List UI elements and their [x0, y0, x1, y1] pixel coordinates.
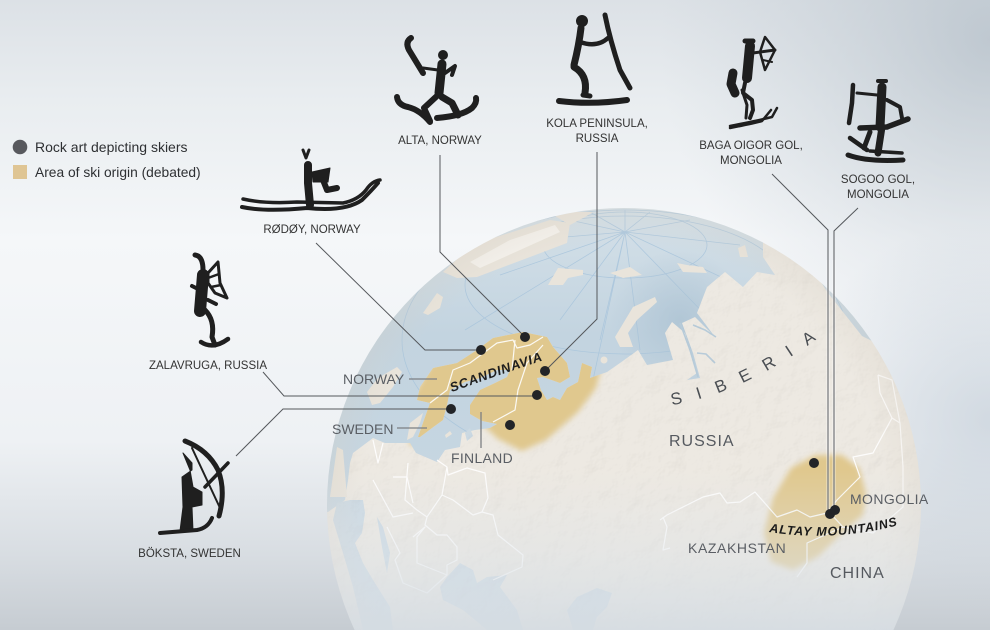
petroglyph: Baga Oigor Gol [730, 37, 777, 128]
label: Finland [451, 412, 513, 466]
area of ski origin [406, 326, 866, 570]
rivers [680, 323, 716, 377]
site label: Zalavruga: ZALAVRUGA, RUSSIA [149, 360, 267, 372]
label: Norway [343, 371, 437, 387]
leader line: Sogoo Gol [834, 208, 858, 510]
petroglyph: Zalavruga [192, 255, 228, 345]
graticule [402, 210, 843, 432]
site label: Kola Peninsula: RUSSIA [576, 133, 619, 145]
area of ski origin: altay [764, 455, 866, 570]
petroglyph: Rødøy [242, 150, 380, 210]
petroglyph: Alta [397, 38, 476, 122]
site label: Sogoo Gol: SOGOO GOL, [841, 174, 915, 186]
legend [13, 139, 201, 180]
leader line: Alta [440, 155, 525, 337]
label: Siberia: SIBERIA [671, 332, 816, 404]
site label: Alta: ALTA, NORWAY [398, 135, 482, 147]
shading and bottom fade [329, 208, 920, 480]
label: Russia: RUSSIA [669, 433, 735, 450]
globe map [327, 208, 921, 630]
site label: Baga Oigor Gol [699, 140, 803, 167]
ocean [327, 208, 872, 512]
site label: Kola Peninsula: KOLA PENINSULA, [546, 118, 648, 130]
greenland ice shading [470, 225, 560, 268]
label: Sweden: SWEDEN [332, 421, 393, 437]
country borders [373, 337, 903, 593]
legend: rock art marker [13, 140, 27, 154]
site label: Sogoo Gol [841, 174, 915, 201]
land [327, 242, 921, 606]
label: Altay Mountains: ALTAY MOUNTAINS [768, 518, 896, 536]
site label: Sogoo Gol: MONGOLIA [847, 189, 909, 201]
label: Mongolia: MONGOLIA [850, 491, 929, 507]
site label: Baga Oigor Gol: BAGA OIGOR GOL, [699, 140, 803, 152]
leader line: Zalavruga [263, 372, 537, 396]
relief texture [876, 458, 880, 463]
rock art site markers [446, 332, 840, 519]
arctic and atlantic islands [330, 212, 748, 497]
petroglyph: Kola Peninsula [559, 15, 630, 103]
label: Scandinavia: SCANDINAVIA [450, 352, 542, 392]
site label: Kola Peninsula [546, 118, 648, 145]
legend: rock art label: Rock art depicting skiers [35, 139, 188, 155]
site label: Rødøy: RØDØY, NORWAY [263, 224, 361, 236]
leader line: Baga Oigor Gol [772, 174, 828, 513]
label: Norway: NORWAY [343, 371, 405, 387]
leader line: Rødøy [316, 243, 481, 350]
leader line: Böksta [236, 409, 451, 456]
petroglyph: Sogoo Gol [848, 81, 908, 160]
label: Kazakhstan: KAZAKHSTAN [688, 540, 786, 556]
label: Sweden [332, 421, 427, 437]
area of ski origin: scandinavia [406, 326, 604, 451]
inland seas [333, 431, 612, 603]
site label: Baga Oigor Gol: MONGOLIA [720, 155, 782, 167]
site label: Böksta: BÖKSTA, SWEDEN [138, 548, 241, 560]
leader line: Kola Peninsula [545, 152, 597, 371]
legend: origin swatch [13, 165, 27, 179]
petroglyph: Böksta [160, 441, 228, 533]
label: Finland: FINLAND [451, 450, 513, 466]
legend: origin label: Area of ski origin (debated) [35, 165, 201, 180]
label: China: CHINA [830, 565, 885, 582]
